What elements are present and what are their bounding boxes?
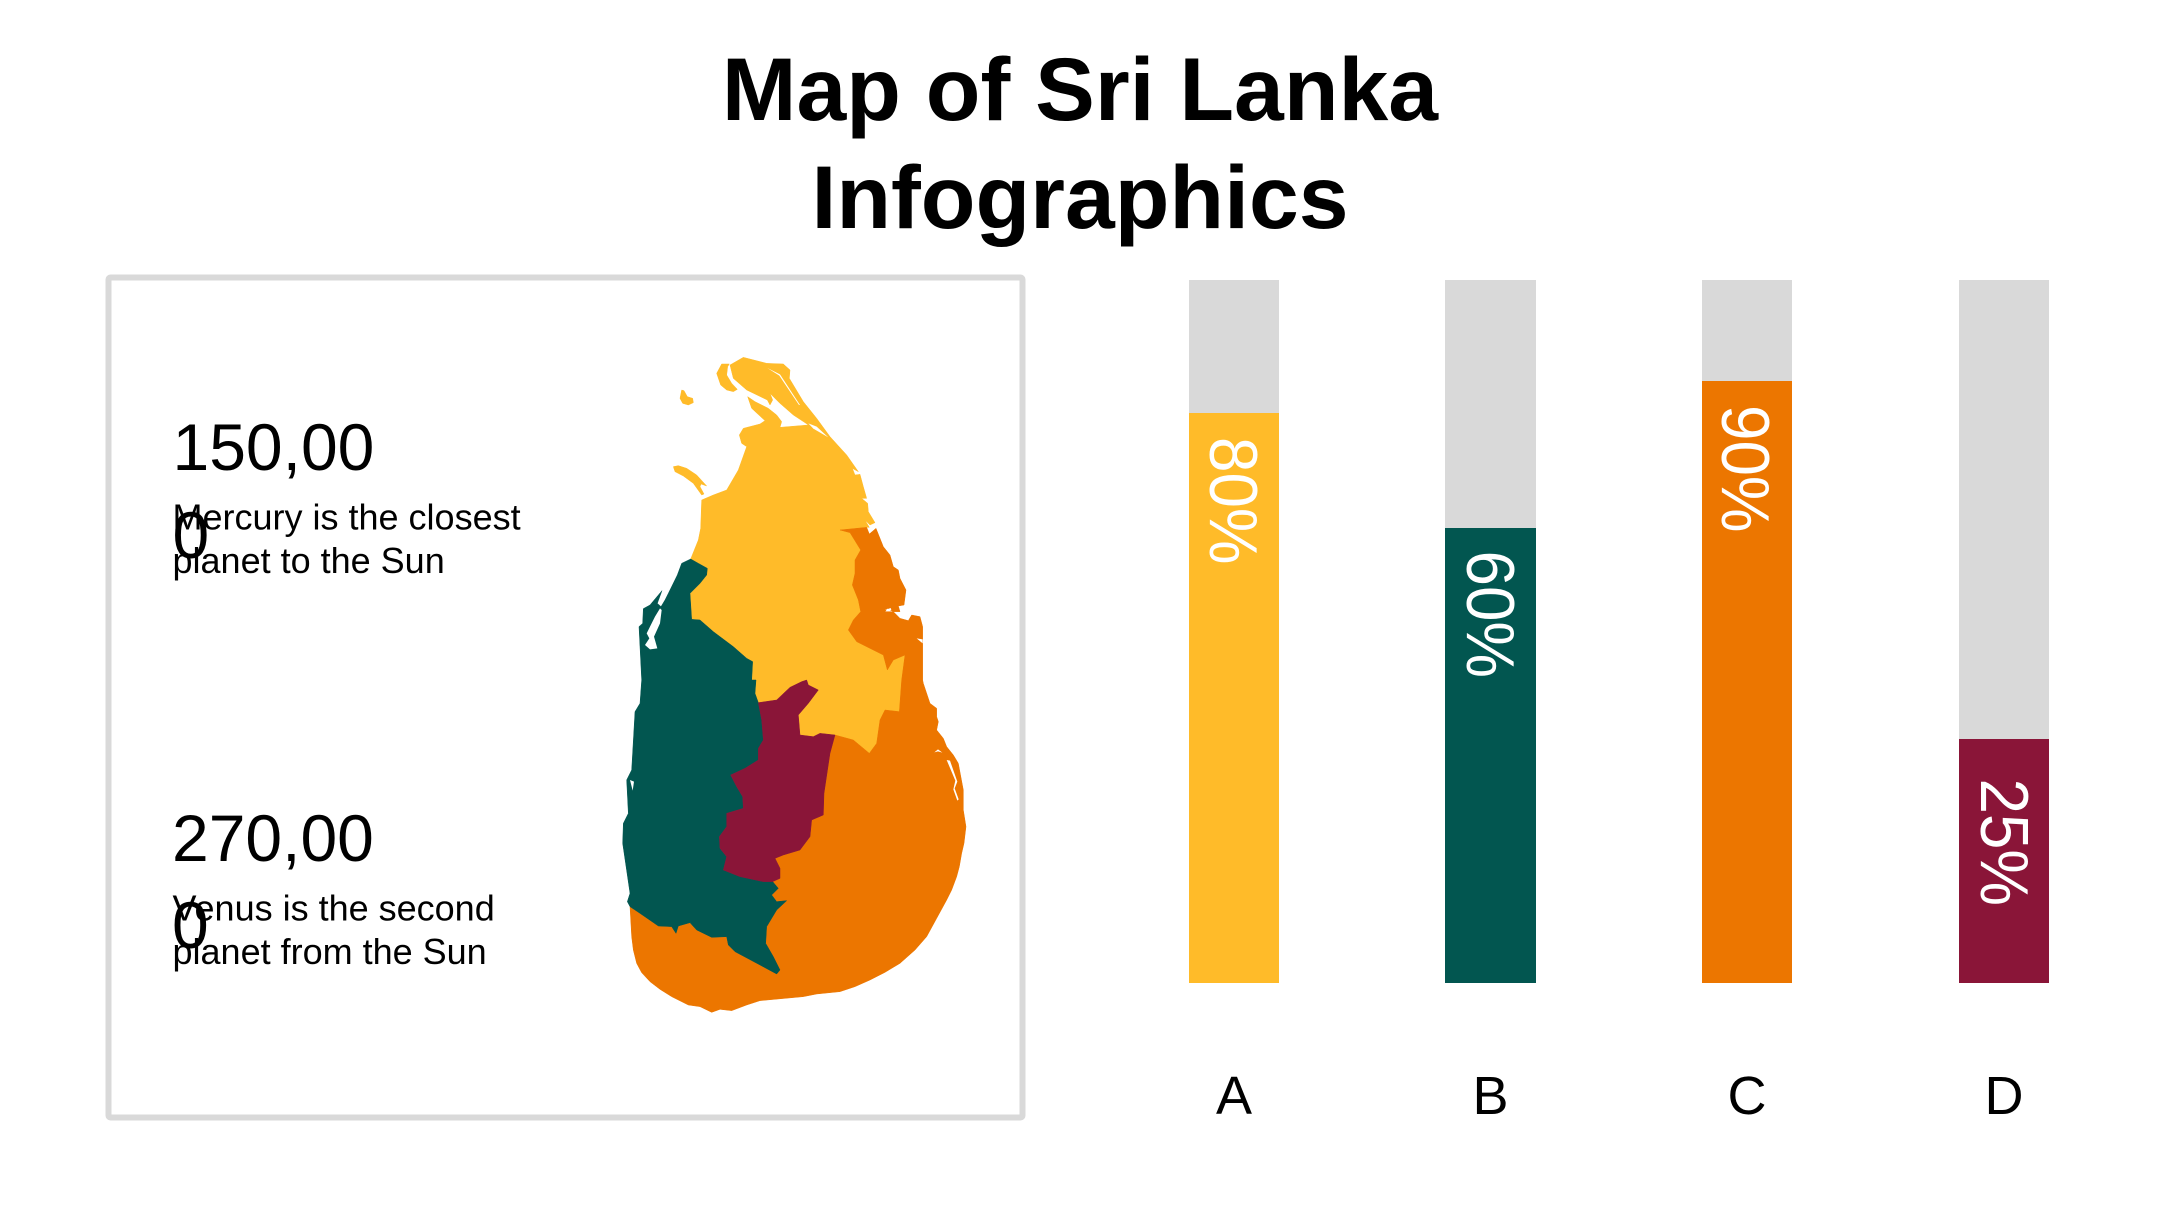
lagoons and inlets [630,368,959,801]
title: Map of Sri Lanka [722,39,1439,139]
text: Mercury description: planet to the Sun [172,540,445,581]
title: Infographics [811,147,1349,247]
text: Venus description: planet from the Sun [172,931,487,972]
text: Venus description: Venus is the second [172,888,495,928]
bar C: 90% [1708,405,1783,533]
stat: 150,000: 0 [172,498,209,572]
bar C [1702,280,1792,1126]
bar A: 80% [1196,437,1271,565]
bar C: C [1728,1066,1766,1126]
stat: 270,000 [172,801,374,962]
bar A: A [1216,1066,1252,1126]
bar D [1959,280,2049,1126]
stat: 150,000 [172,410,374,572]
bar B: 60% [1453,550,1528,678]
bar chart [1189,280,2049,1126]
text: Venus description [172,888,495,972]
stat: 150,000: 150,00 [172,410,374,484]
stat: 270,000: 270,00 [172,801,374,875]
panel: map frame [108,278,1022,1118]
bar B: B [1472,1066,1509,1126]
text: Mercury description [172,496,521,581]
stat: 270,000: 0 [172,888,209,962]
region: east and south (orange) [630,527,966,1012]
bar A [1189,280,1279,1126]
bar D: D [1984,1066,2024,1126]
bar D: 25% [1967,778,2042,906]
region: north (yellow) [673,357,905,753]
title [722,39,1439,247]
text: Mercury description: Mercury is the closest [172,496,521,538]
bar B [1445,280,1536,1126]
region: central (maroon) [719,680,835,882]
map of Sri Lanka [623,357,966,1012]
region: west (teal) [623,559,787,974]
